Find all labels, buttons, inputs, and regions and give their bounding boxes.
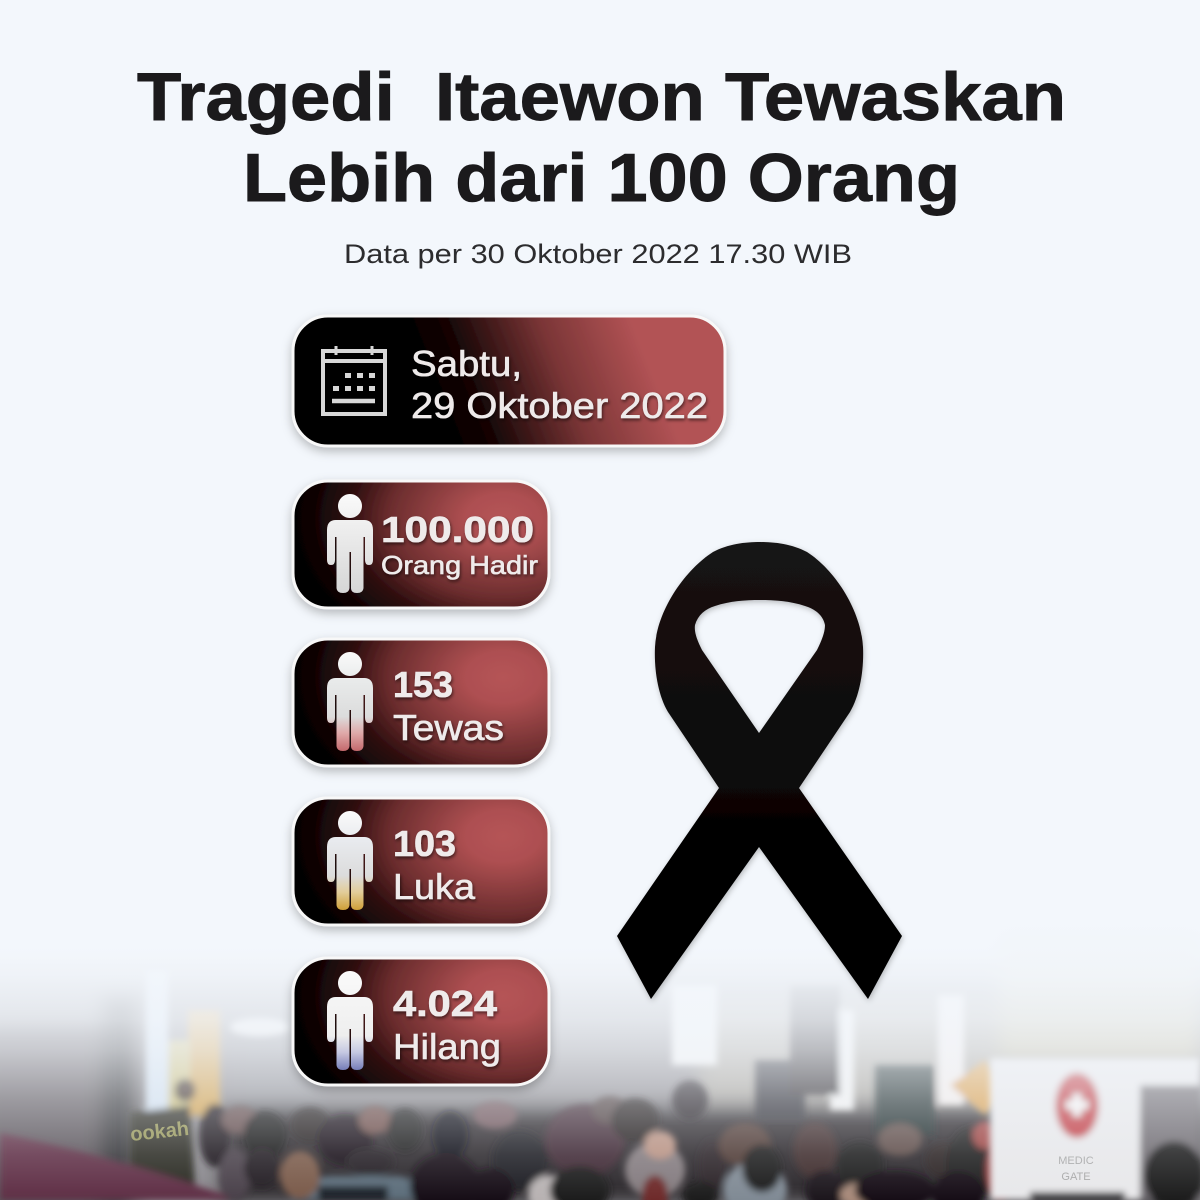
stat text: 153 [393,664,453,705]
stat text [393,664,504,748]
stat text: 4.024 [393,983,497,1024]
icon: person red legs [327,652,373,751]
title: Lebih dari 100 Orang [243,140,960,216]
card: 103 luka [293,798,549,925]
stat text: Hilang [393,1026,501,1067]
stat text [393,823,476,907]
stat text: Orang Hadir [381,550,538,580]
title: Tragedi Itaewon Tewaskan [137,59,1066,135]
icon: black mourning ribbon [617,542,902,999]
subtitle: data date: Data per 30 Oktober 2022 17.30 WIB [344,239,852,269]
date text [411,343,708,426]
title [137,59,1066,216]
card: 153 tewas [293,639,549,766]
stat text: Tewas [393,707,504,748]
icon: person blue legs [327,971,373,1070]
card: 4.024 hilang [293,958,549,1085]
icon: person white [327,494,373,593]
stat text: 103 [393,823,456,864]
date text: Sabtu, [411,343,522,384]
card: date [293,316,725,446]
crowd photo background: GATE [1061,1171,1091,1183]
card: 100.000 orang hadir [293,481,549,608]
stat text: 100.000 [381,509,534,550]
date text: 29 Oktober 2022 [411,385,708,426]
stat text [381,509,538,580]
stat text: Luka [393,866,476,907]
crowd photo background [0,930,1200,1200]
crowd photo background: MEDIC [1058,1155,1094,1167]
medic gate box [990,1058,1200,1200]
icon: person yellow legs [327,811,373,910]
crowd photo background: ookah [129,1118,190,1146]
icon: calendar [323,346,385,414]
stat text [393,983,501,1067]
fog overlay on photo [0,900,1200,1200]
